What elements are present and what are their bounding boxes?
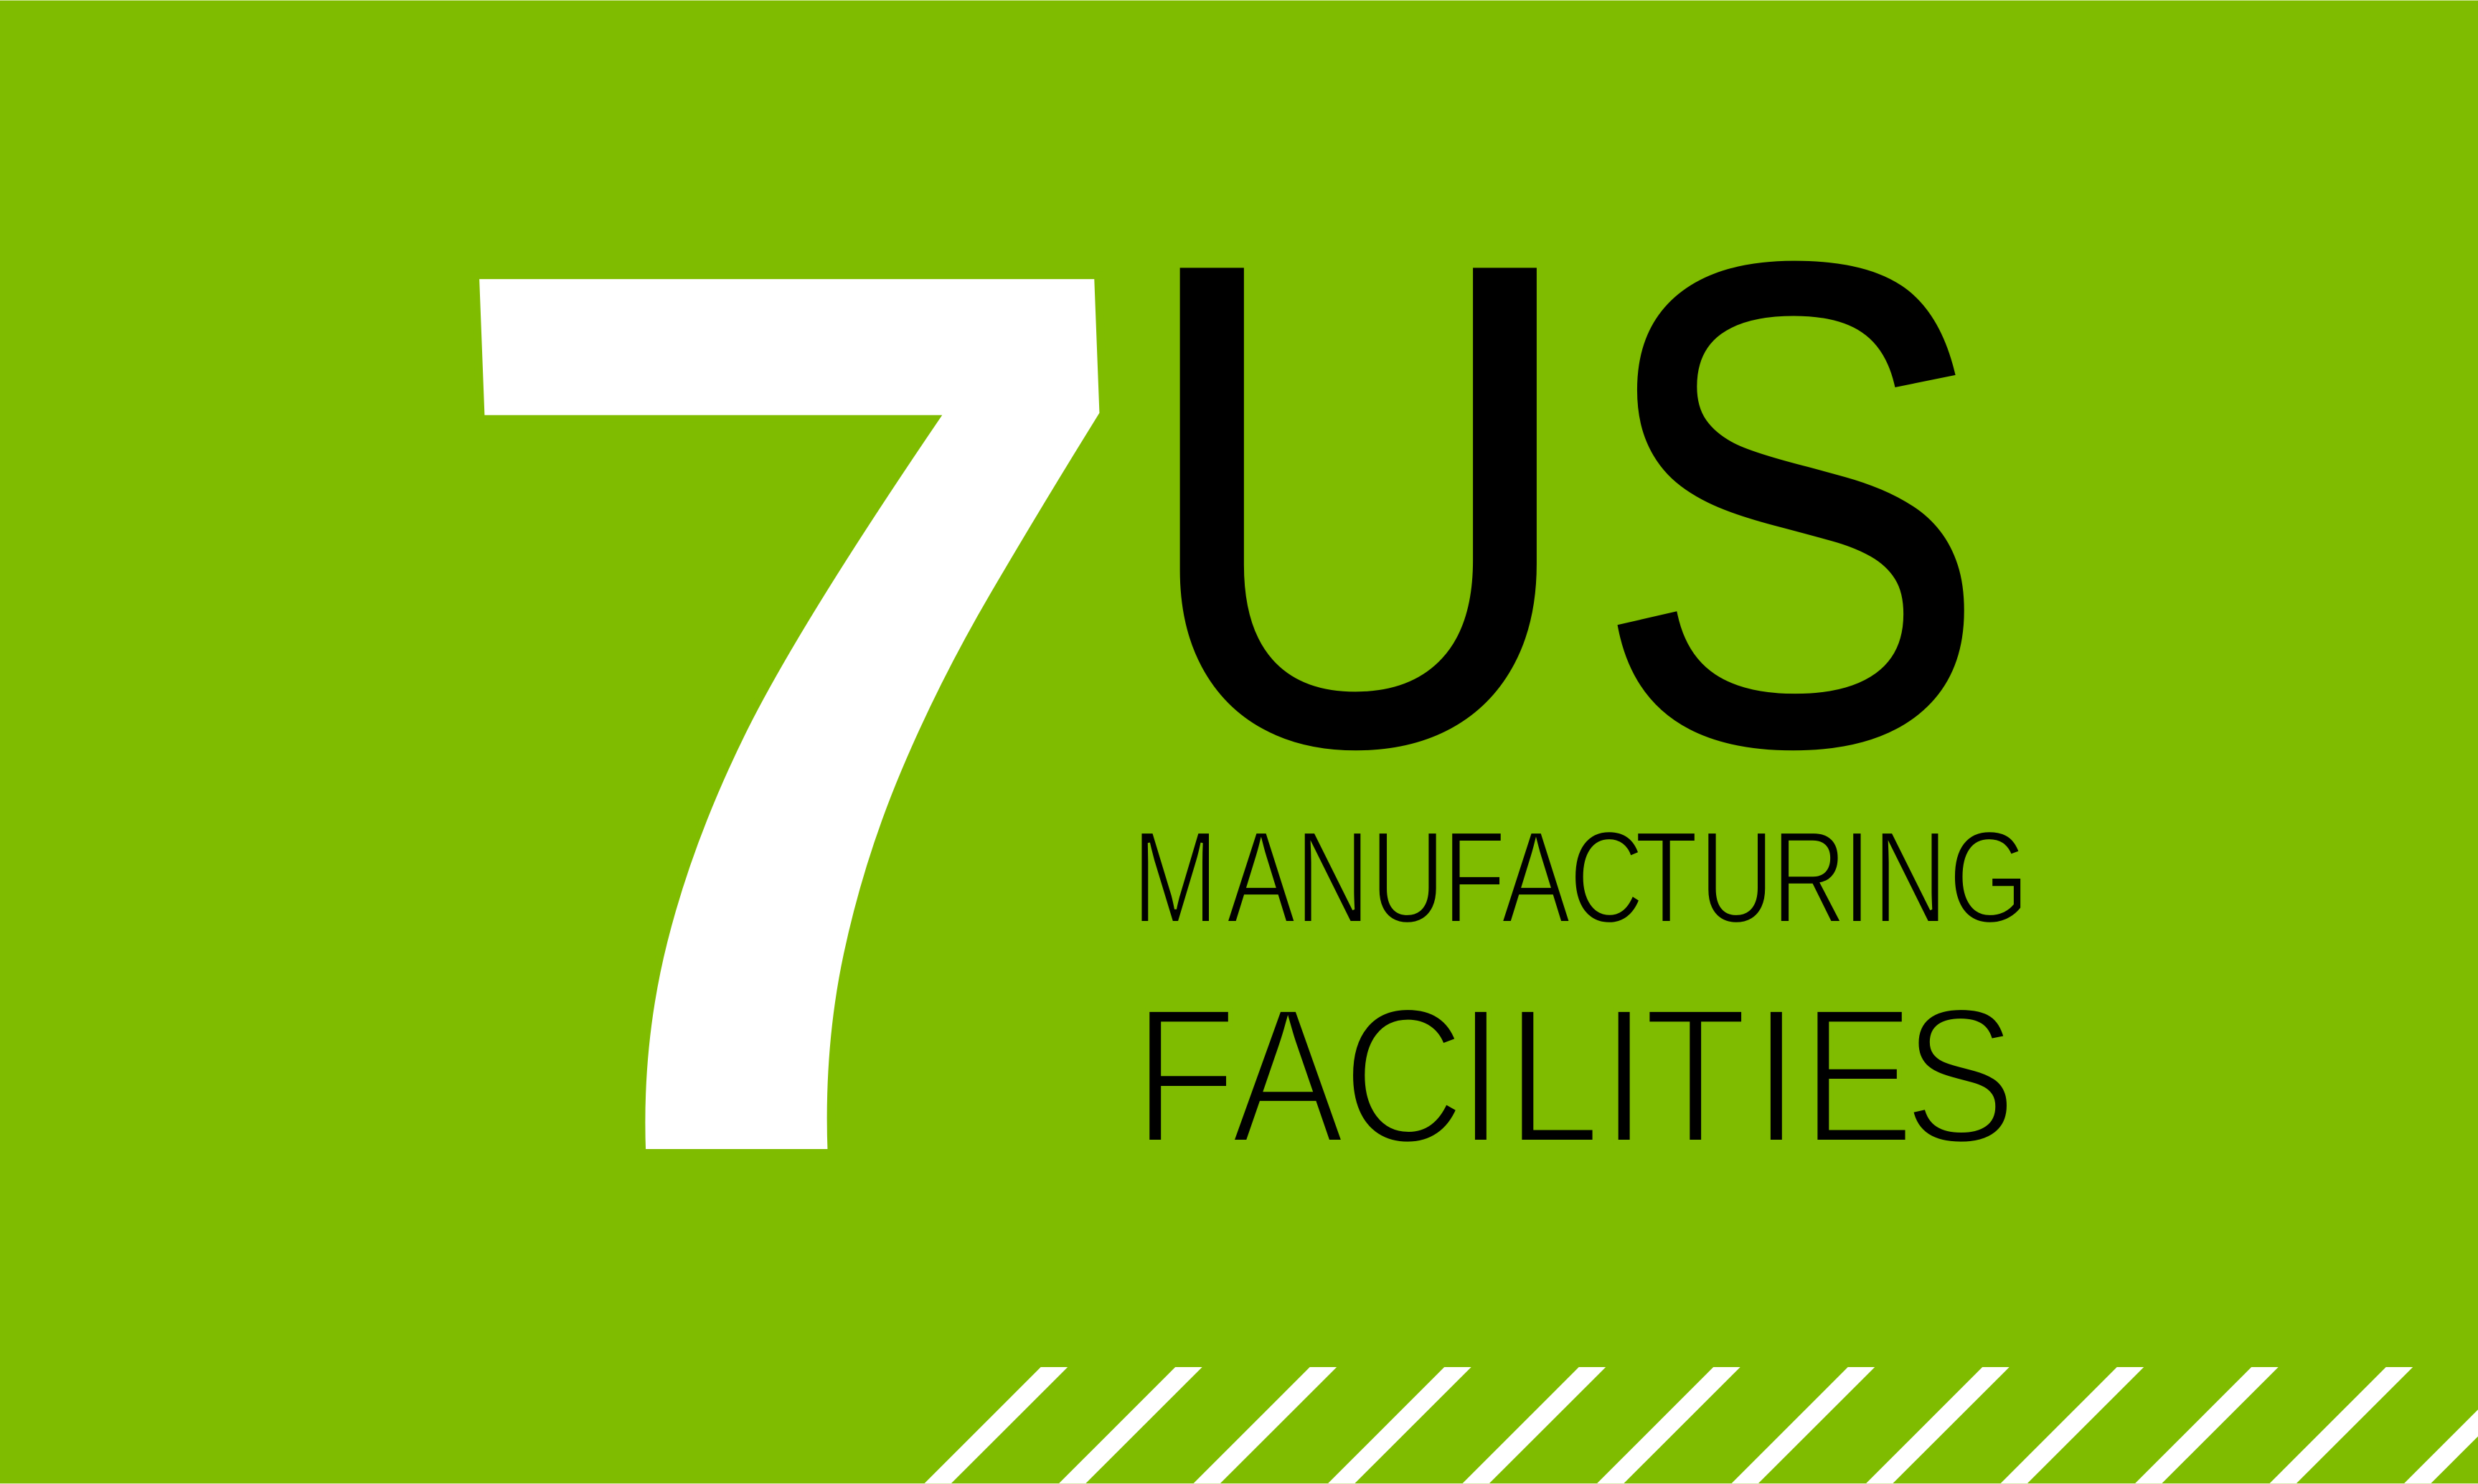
diagonal stripes: [925, 1367, 2478, 1483]
heading: US: U: [1136, 123, 1581, 884]
heading: US: S: [1594, 125, 1988, 885]
text: FACILITIES: FACILITIES: [1134, 968, 2017, 1183]
big number 7: 7: [407, 0, 1201, 1424]
text: MANUFACTURING: MANUFACTURING: [1132, 804, 2030, 950]
heading: US: [1136, 123, 1988, 885]
